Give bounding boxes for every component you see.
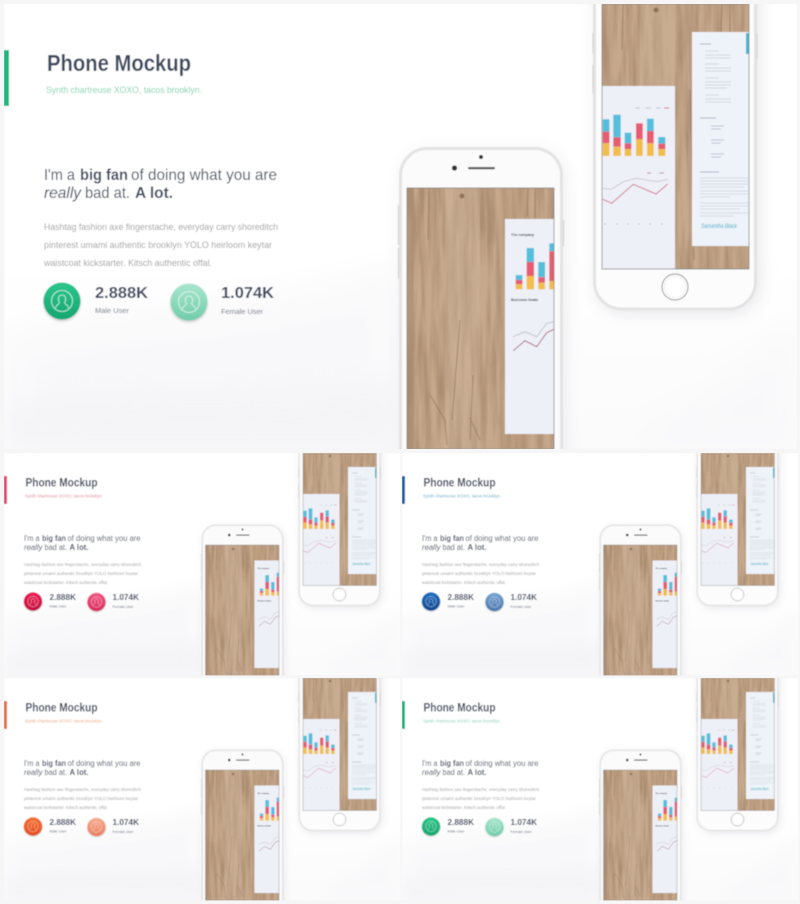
slide backdrop — [4, 4, 796, 331]
heading: really — [422, 543, 441, 552]
body text — [422, 562, 539, 585]
heading: bad at. — [44, 543, 67, 552]
stat: female user — [170, 284, 274, 320]
stat: male user — [24, 817, 76, 836]
body text — [24, 787, 141, 810]
body text: waistcoat kickstarter. Kitsch authentic offal. — [422, 580, 506, 585]
stat: female user: Female User — [112, 605, 134, 609]
heading — [24, 534, 141, 552]
phone: upper mockup — [298, 626, 382, 833]
stat: male user: Male User — [448, 830, 465, 834]
subtitle: Synth chartreuse XOXO, tacos brooklyn. — [423, 718, 501, 724]
body text: waistcoat kickstarter. Kitsch authentic offal. — [24, 805, 108, 810]
stat: female user — [87, 593, 139, 611]
stat: female user — [485, 593, 537, 611]
stat: male user — [422, 592, 474, 611]
body text: waistcoat kickstarter. Kitsch authentic offal. — [43, 258, 212, 268]
stat: female user: 1.074K — [112, 593, 139, 602]
stat: female user: Female User — [221, 307, 263, 316]
subtitle: Synth chartreuse XOXO, tacos brooklyn. — [25, 718, 103, 724]
stat: male user: Male User — [50, 604, 67, 608]
stat: male user: 2.888K — [50, 593, 76, 602]
body text: waistcoat kickstarter. Kitsch authentic offal. — [422, 805, 506, 810]
stat: male user: Male User — [50, 830, 67, 834]
panel: main green slide — [4, 0, 797, 490]
phone: upper mockup — [696, 453, 782, 609]
heading: I'm a — [422, 759, 438, 768]
phone: upper mockup — [593, 0, 760, 314]
stat: male user: Male User — [448, 604, 465, 608]
stat: male user: 2.888K — [448, 593, 474, 602]
title: Phone Mockup — [47, 50, 191, 76]
slide backdrop — [4, 678, 400, 841]
title: Phone Mockup — [424, 478, 496, 490]
stat: female user: 1.074K — [510, 593, 537, 602]
stat: female user — [485, 818, 537, 836]
accent bar — [402, 476, 405, 504]
heading: A lot. — [468, 543, 486, 552]
heading: of doing what you are — [68, 534, 141, 543]
heading: really — [24, 543, 43, 552]
stat: female user: Female User — [510, 605, 532, 609]
heading: of doing what you are — [131, 167, 277, 184]
body text: pinterest umami authentic brooklyn YOLO heirloom keytar — [24, 571, 138, 576]
body text: pinterest umami authentic brooklyn YOLO heirloom keytar — [422, 571, 536, 576]
slide backdrop — [402, 678, 798, 900]
heading: A lot. — [70, 543, 88, 552]
heading: bad at. — [85, 185, 130, 202]
subtitle: Synth chartreuse XOXO, tacos brooklyn. — [46, 85, 202, 96]
accent bar — [402, 701, 405, 729]
stat: male user: Male User — [95, 306, 129, 315]
heading: big fan — [42, 759, 66, 768]
heading: big fan — [80, 167, 128, 184]
heading — [44, 167, 277, 202]
accent bar — [4, 476, 7, 504]
stat: male user — [24, 592, 76, 611]
panel: second green slide — [402, 626, 798, 904]
phone: upper mockup — [696, 626, 780, 833]
stat: female user: 1.074K — [221, 285, 274, 302]
stat: male user: 2.888K — [50, 818, 76, 827]
heading: A lot. — [135, 185, 173, 202]
heading: really — [44, 185, 82, 202]
stat: female user — [87, 818, 139, 836]
heading — [24, 759, 141, 777]
body text — [43, 222, 278, 268]
stat: female user: Female User — [510, 830, 532, 834]
heading: I'm a — [44, 167, 75, 184]
body text — [422, 787, 539, 810]
body text: pinterest umami authentic brooklyn YOLO heirloom keytar — [44, 240, 272, 250]
heading: A lot. — [468, 768, 486, 777]
subtitle: Synth chartreuse XOXO, tacos brooklyn. — [423, 494, 501, 500]
body text: waistcoat kickstarter. Kitsch authentic offal. — [24, 580, 108, 585]
panel: red slide — [4, 453, 400, 676]
phone: lower mockup — [599, 525, 683, 696]
slide backdrop — [4, 454, 400, 616]
heading: big fan — [42, 534, 66, 543]
heading: of doing what you are — [466, 534, 539, 543]
heading: bad at. — [442, 768, 465, 777]
title: Phone Mockup — [26, 478, 98, 490]
heading: of doing what you are — [68, 759, 141, 768]
phone: lower mockup — [398, 146, 568, 449]
title: Phone Mockup — [424, 702, 496, 714]
stat: female user: Female User — [112, 830, 134, 834]
phone: upper mockup — [298, 453, 384, 609]
heading: I'm a — [24, 534, 40, 543]
heading: I'm a — [24, 759, 40, 768]
body text: pinterest umami authentic brooklyn YOLO heirloom keytar — [422, 796, 536, 801]
accent bar — [4, 701, 7, 729]
title: Phone Mockup — [26, 702, 98, 714]
accent bar — [4, 50, 9, 106]
stat: male user — [44, 282, 148, 320]
panel: orange slide — [4, 678, 400, 900]
phone: lower mockup — [599, 750, 683, 904]
heading — [422, 534, 539, 552]
heading: big fan — [440, 534, 464, 543]
phone: lower mockup — [201, 750, 285, 904]
stat: female user: 1.074K — [510, 818, 537, 827]
stat: male user: 2.888K — [448, 818, 474, 827]
slide backdrop — [402, 454, 798, 616]
body text: Hashtag fashion axe fingerstache, everyday carry shoreditch — [44, 222, 278, 232]
body text: Hashtag fashion axe fingerstache, everyday carry shoreditch — [422, 787, 539, 792]
body text — [24, 562, 141, 585]
heading: really — [422, 768, 441, 777]
stat: female user: 1.074K — [112, 818, 139, 827]
body text: Hashtag fashion axe fingerstache, everyday carry shoreditch — [422, 562, 539, 567]
heading: big fan — [440, 759, 464, 768]
heading: bad at. — [442, 543, 465, 552]
body text: pinterest umami authentic brooklyn YOLO heirloom keytar — [24, 796, 138, 801]
body text: Hashtag fashion axe fingerstache, everyday carry shoreditch — [24, 562, 141, 567]
heading — [422, 759, 539, 777]
heading: A lot. — [70, 768, 88, 777]
heading: bad at. — [44, 768, 67, 777]
panel: blue slide — [402, 453, 798, 676]
subtitle: Synth chartreuse XOXO, tacos brooklyn. — [25, 494, 103, 500]
stat: male user: 2.888K — [95, 285, 148, 302]
heading: I'm a — [422, 534, 438, 543]
body text: Hashtag fashion axe fingerstache, everyday carry shoreditch — [24, 787, 141, 792]
heading: really — [24, 768, 43, 777]
heading: of doing what you are — [466, 759, 539, 768]
phone: lower mockup — [201, 525, 285, 696]
stat: male user — [422, 817, 474, 836]
